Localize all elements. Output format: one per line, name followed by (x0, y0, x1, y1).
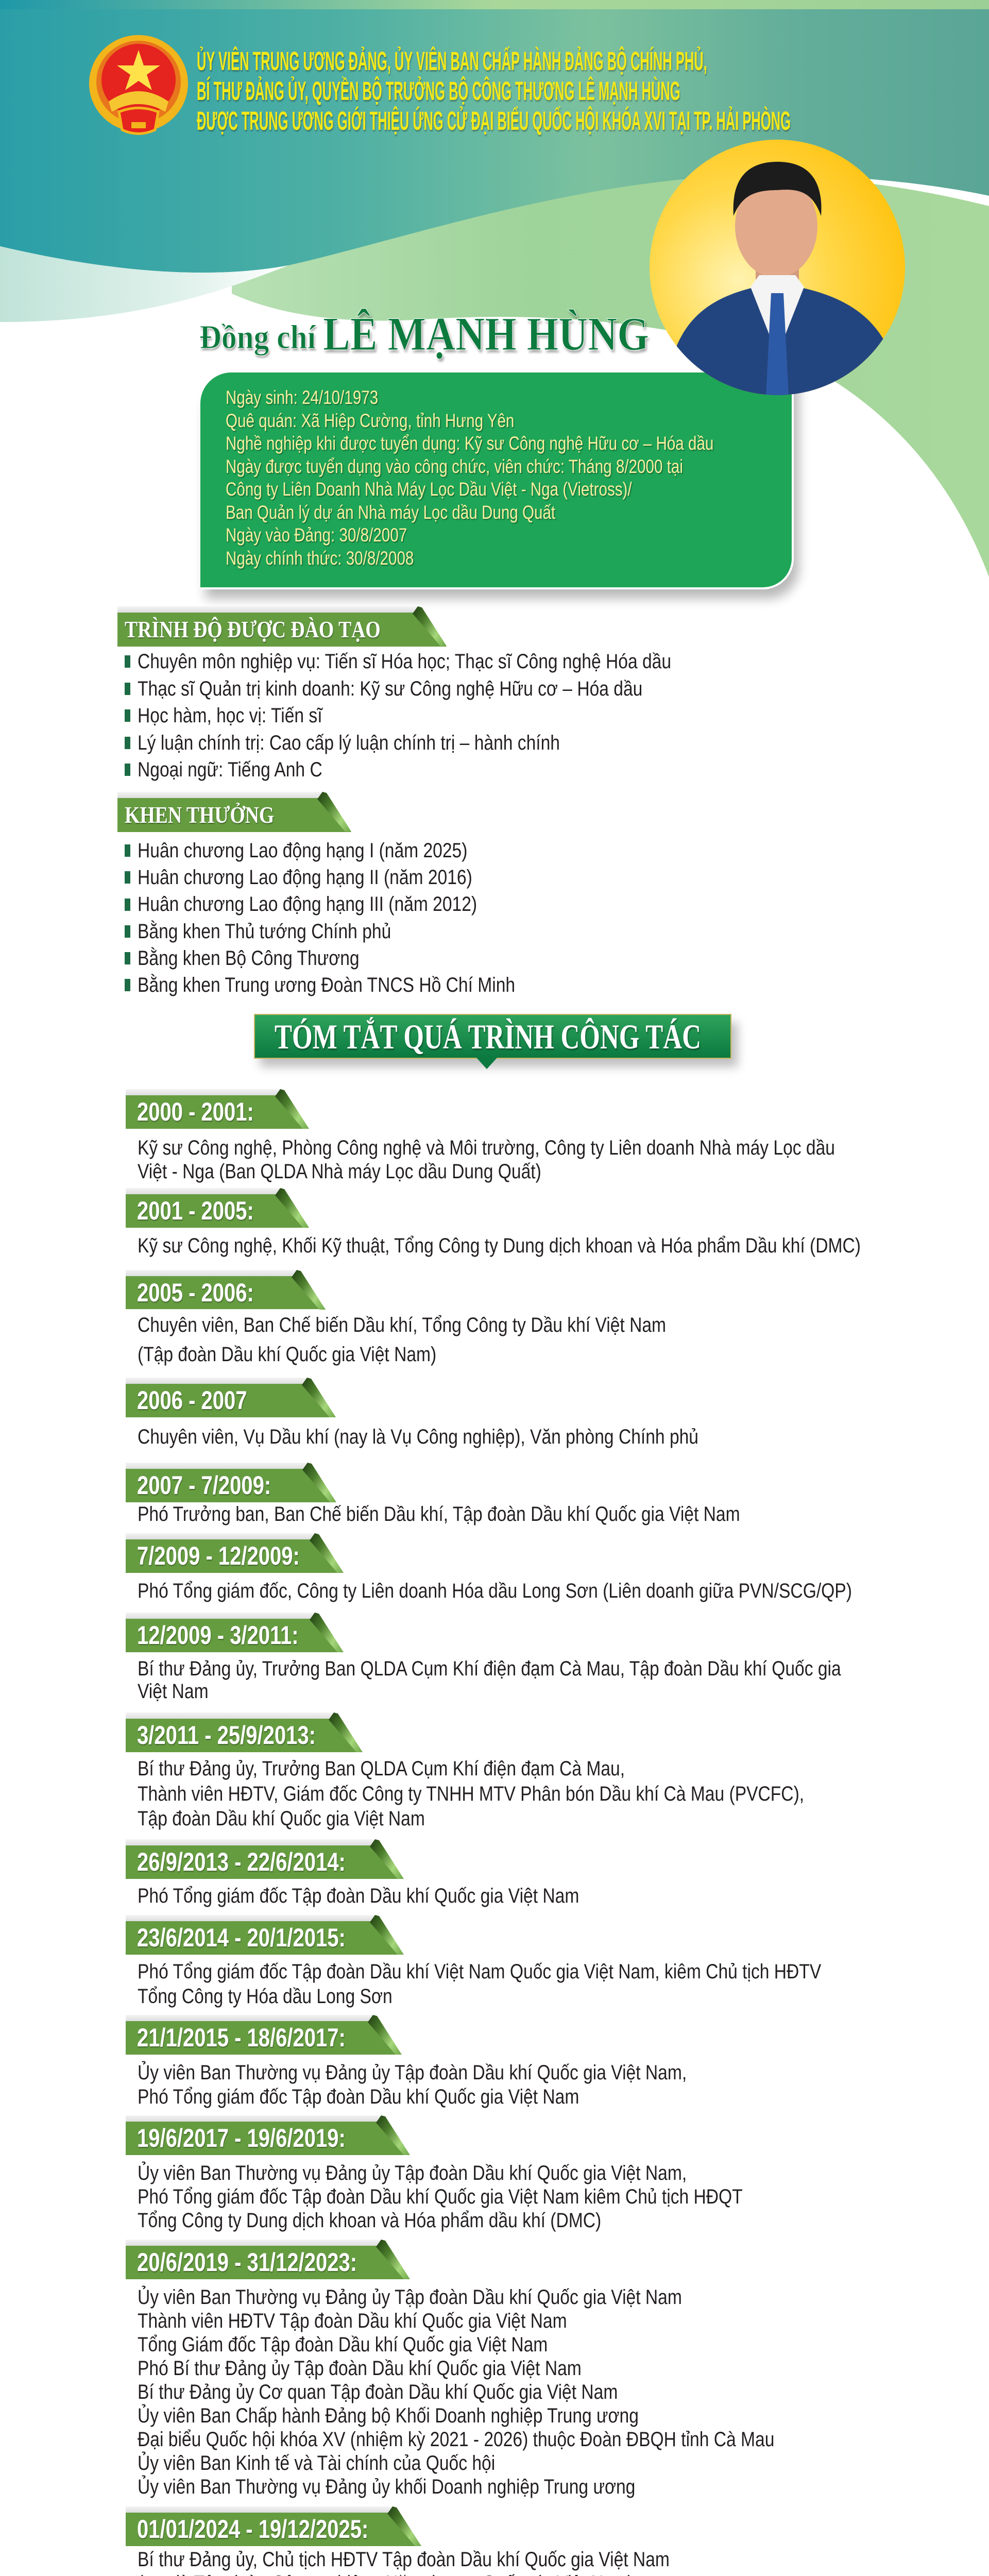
timeline: 23/6/2014 - 20/1/2015: Phó Tổng giám đốc Tập đoàn Dầu khí Việt Nam Quốc gia Việt Nam, kiêm Chủ tịch HĐTV (138, 1960, 821, 1983)
panel: profile info box: Ngày chính thức: 30/8/2008 (226, 547, 414, 569)
list: awards: Bằng khen Thủ tướng Chính phủ (138, 920, 391, 943)
section heading: awards (117, 792, 351, 832)
timeline: 26/9/2013 - 22/6/2014: 26/9/2013 - 22/6/2014: (137, 1848, 346, 1876)
timeline: 7/2009 - 12/2009: Phó Tổng giám đốc, Công ty Liên doanh Hóa dầu Long Sơn (Liên doanh giữa PVN/SCG/QP) (138, 1580, 852, 1602)
timeline: 23/6/2014 - 20/1/2015: 23/6/2014 - 20/1/2015: (137, 1923, 346, 1952)
timeline: 19/6/2017 - 19/6/2019: Ủy viên Ban Thường vụ Đảng ủy Tập đoàn Dầu khí Quốc gia Việt Nam, (138, 2162, 687, 2184)
timeline: 12/2009 - 3/2011: 12/2009 - 3/2011: (137, 1621, 299, 1650)
list: training: Thạc sĩ Quản trị kinh doanh: Kỹ sư Công nghệ Hữu cơ – Hóa dầu (138, 677, 642, 700)
timeline: 2000 - 2001: Việt - Nga (Ban QLDA Nhà máy Lọc dầu Dung Quất) (138, 1160, 541, 1183)
panel: profile info box: Nghề nghiệp khi được tuyển dụng: Kỹ sư Công nghệ Hữu cơ – Hóa dầu (226, 433, 713, 454)
name heading: Đồng chí (199, 318, 316, 356)
photo: portrait in yellow circle (650, 140, 905, 395)
timeline: 20/6/2019 - 31/12/2023: Đại biểu Quốc hội khóa XV (nhiệm kỳ 2021 - 2026) thuộc Đoàn ĐBQH tỉnh Cà Mau (138, 2428, 774, 2451)
timeline: 3/2011 - 25/9/2013: Tập đoàn Dầu khí Quốc gia Việt Nam (138, 1807, 425, 1830)
timeline: 19/6/2017 - 19/6/2019 (126, 2115, 743, 2232)
list: awards (125, 839, 515, 996)
timeline: 01/01/2024 - 19/12/2025 (126, 2506, 670, 2576)
timeline: 20/6/2019 - 31/12/2023: Tổng Giám đốc Tập đoàn Dầu khí Quốc gia Việt Nam (138, 2333, 548, 2356)
timeline: 2005 - 2006 (126, 1270, 666, 1366)
timeline: 3/2011 - 25/9/2013: Thành viên HĐTV, Giám đốc Công ty TNHH MTV Phân bón Dầu khí Cà Mau (PVCFC), (138, 1783, 804, 1805)
timeline: 2001 - 2005: Kỹ sư Công nghệ, Khối Kỹ thuật, Tổng Công ty Dung dịch khoan và Hóa phẩm Dầu khí (DMC) (138, 1234, 861, 1257)
timeline: 7/2009 - 12/2009 (126, 1533, 852, 1602)
timeline: 12/2009 - 3/2011: Việt Nam (138, 1680, 209, 1703)
timeline: 2007 - 7/2009 (126, 1463, 740, 1526)
timeline: 2005 - 2006: 2005 - 2006: (137, 1278, 254, 1307)
timeline: 21/1/2015 - 18/6/2017: Phó Tổng giám đốc Tập đoàn Dầu khí Quốc gia Việt Nam (138, 2086, 579, 2108)
title: BÍ THƯ ĐẢNG ỦY, QUYỀN BỘ TRƯỞNG BỘ CÔNG THƯƠNG LÊ MẠNH HÙNG (197, 76, 680, 106)
panel: profile info box: Ngày sinh: 24/10/1973 (226, 387, 378, 408)
banner: career summary heading (254, 1014, 743, 1073)
timeline: 23/6/2014 - 20/1/2015 (126, 1915, 821, 2008)
timeline: 2001 - 2005: 2001 - 2005: (137, 1196, 254, 1225)
banner: career summary heading: TÓM TẮT QUÁ TRÌNH CÔNG TÁC (275, 1017, 701, 1056)
timeline: 12/2009 - 3/2011 (126, 1613, 841, 1703)
list: training: Học hàm, học vị: Tiến sĩ (138, 704, 322, 727)
timeline: 01/01/2024 - 19/12/2025: Bí thư Đảng ủy, Chủ tịch HĐTV Tập đoàn Dầu khí Quốc gia Việt Nam (138, 2548, 670, 2571)
icon: national emblem (89, 35, 188, 135)
timeline: 26/9/2013 - 22/6/2014 (126, 1839, 579, 1907)
timeline: 19/6/2017 - 19/6/2019: Tổng Công ty Dung dịch khoan và Hóa phẩm dầu khí (DMC) (138, 2209, 601, 2232)
timeline: 3/2011 - 25/9/2013: 3/2011 - 25/9/2013: (137, 1721, 316, 1750)
panel: profile info box (200, 372, 794, 589)
timeline: 2006 - 2007 (126, 1378, 698, 1448)
timeline: 2005 - 2006: Chuyên viên, Ban Chế biến Dầu khí, Tổng Công ty Dầu khí Việt Nam (138, 1314, 666, 1336)
name heading (199, 308, 650, 363)
timeline: 20/6/2019 - 31/12/2023: Ủy viên Ban Thường vụ Đảng ủy khối Doanh nghiệp Trung ương (138, 2476, 635, 2498)
timeline: 3/2011 - 25/9/2013: Bí thư Đảng ủy, Trưởng Ban QLDA Cụm Khí điện đạm Cà Mau, (138, 1757, 625, 1780)
timeline: 21/1/2015 - 18/6/2017: 21/1/2015 - 18/6/2017: (137, 2023, 346, 2052)
timeline: 21/1/2015 - 18/6/2017 (126, 2015, 687, 2108)
panel: profile info box: Công ty Liên Doanh Nhà Máy Lọc Dầu Việt - Nga (Vietross)/ (226, 479, 632, 500)
list: training: Chuyên môn nghiệp vụ: Tiến sĩ Hóa học; Thạc sĩ Công nghệ Hóa dầu (138, 650, 671, 673)
list: awards: Bằng khen Trung ương Đoàn TNCS Hồ Chí Minh (138, 974, 515, 996)
section heading: training: TRÌNH ĐỘ ĐƯỢC ĐÀO TẠO (125, 616, 381, 642)
timeline: 20/6/2019 - 31/12/2023: Thành viên HĐTV Tập đoàn Dầu khí Quốc gia Việt Nam (138, 2310, 567, 2332)
list: awards: Huân chương Lao động hạng III (năm 2012) (138, 893, 477, 916)
panel: profile info box: Ngày được tuyển dụng vào công chức, viên chức: Tháng 8/2000 tại (226, 455, 683, 477)
background: header waves (0, 0, 989, 577)
panel: profile info box: Ngày vào Đảng: 30/8/2007 (226, 524, 407, 546)
timeline: 12/2009 - 3/2011: Bí thư Đảng ủy, Trưởng Ban QLDA Cụm Khí điện đạm Cà Mau, Tập đoàn Dầu khí Quốc gia (138, 1657, 841, 1680)
list: awards: Bằng khen Bộ Công Thương (138, 947, 360, 970)
timeline: 2005 - 2006: (Tập đoàn Dầu khí Quốc gia Việt Nam) (138, 1343, 436, 1366)
timeline: 2000 - 2001: Kỹ sư Công nghệ, Phòng Công nghệ và Môi trường, Công ty Liên doanh Nhà máy Lọc dầu (138, 1137, 835, 1159)
timeline: 23/6/2014 - 20/1/2015: Tổng Công ty Hóa dầu Long Sơn (138, 1985, 393, 2008)
title: ỦY VIÊN TRUNG ƯƠNG ĐẢNG, ỦY VIÊN BAN CHẤP HÀNH ĐẢNG BỘ CHÍNH PHỦ, (197, 46, 707, 76)
timeline: 19/6/2017 - 19/6/2019: 19/6/2017 - 19/6/2019: (137, 2124, 346, 2153)
list: awards: Huân chương Lao động hạng I (năm 2025) (138, 839, 467, 862)
panel: profile info box: Ban Quản lý dự án Nhà máy Lọc dầu Dung Quất (226, 502, 555, 522)
timeline: 20/6/2019 - 31/12/2023: Ủy viên Ban Chấp hành Đảng bộ Khối Doanh nghiệp Trung ương (138, 2404, 639, 2427)
timeline: 3/2011 - 25/9/2013 (126, 1713, 804, 1830)
list: training: Ngoại ngữ: Tiếng Anh C (138, 758, 322, 781)
timeline: 20/6/2019 - 31/12/2023: Bí thư Đảng ủy Cơ quan Tập đoàn Dầu khí Quốc gia Việt Nam (138, 2381, 618, 2403)
section heading: awards: KHEN THƯỞNG (125, 802, 274, 828)
timeline: 2006 - 2007: 2006 - 2007 (137, 1386, 247, 1415)
timeline: 26/9/2013 - 22/6/2014: Phó Tổng giám đốc Tập đoàn Dầu khí Quốc gia Việt Nam (138, 1885, 579, 1907)
list: awards: Huân chương Lao động hạng II (năm 2016) (138, 866, 472, 889)
title (197, 46, 791, 137)
timeline: 20/6/2019 - 31/12/2023: 20/6/2019 - 31/12/2023: (137, 2248, 357, 2277)
list: training: Lý luận chính trị: Cao cấp lý luận chính trị – hành chính (138, 732, 560, 754)
name heading: LÊ MẠNH HÙNG (323, 308, 649, 360)
timeline: 20/6/2019 - 31/12/2023: Ủy viên Ban Thường vụ Đảng ủy Tập đoàn Dầu khí Quốc gia Việt Nam (138, 2286, 682, 2309)
list: training (125, 650, 671, 781)
timeline: 20/6/2019 - 31/12/2023: Ủy viên Ban Kinh tế và Tài chính của Quốc hội (138, 2452, 495, 2475)
timeline: 2001 - 2005 (126, 1188, 861, 1257)
timeline: 7/2009 - 12/2009: 7/2009 - 12/2009: (137, 1541, 300, 1570)
title: ĐƯỢC TRUNG ƯƠNG GIỚI THIỆU ỨNG CỬ ĐẠI BIỂU QUỐC HỘI KHÓA XVI TẠI TP. HẢI PHÒNG (197, 106, 791, 135)
timeline: 21/1/2015 - 18/6/2017: Ủy viên Ban Thường vụ Đảng ủy Tập đoàn Dầu khí Quốc gia Việt Nam, (138, 2061, 687, 2084)
timeline: 01/01/2024 - 19/12/2025: 01/01/2024 - 19/12/2025: (137, 2515, 368, 2544)
timeline: 2007 - 7/2009: Phó Trưởng ban, Ban Chế biến Dầu khí, Tập đoàn Dầu khí Quốc gia Việt Nam (138, 1503, 740, 1526)
timeline: 2000 - 2001 (126, 1089, 835, 1183)
timeline: 2000 - 2001: 2000 - 2001: (137, 1097, 254, 1126)
timeline: 2007 - 7/2009: 2007 - 7/2009: (137, 1471, 271, 1500)
timeline: 20/6/2019 - 31/12/2023 (126, 2240, 774, 2498)
section heading: training (117, 606, 447, 647)
timeline: 19/6/2017 - 19/6/2019: Phó Tổng giám đốc Tập đoàn Dầu khí Quốc gia Việt Nam kiêm Chủ tịch HĐQT (138, 2185, 743, 2208)
panel: profile info box: Quê quán: Xã Hiệp Cường, tỉnh Hưng Yên (226, 410, 514, 431)
timeline: 20/6/2019 - 31/12/2023: Phó Bí thư Đảng ủy Tập đoàn Dầu khí Quốc gia Việt Nam (138, 2357, 582, 2380)
timeline: 2006 - 2007: Chuyên viên, Vụ Dầu khí (nay là Vụ Công nghiệp), Văn phòng Chính phủ (138, 1426, 698, 1448)
